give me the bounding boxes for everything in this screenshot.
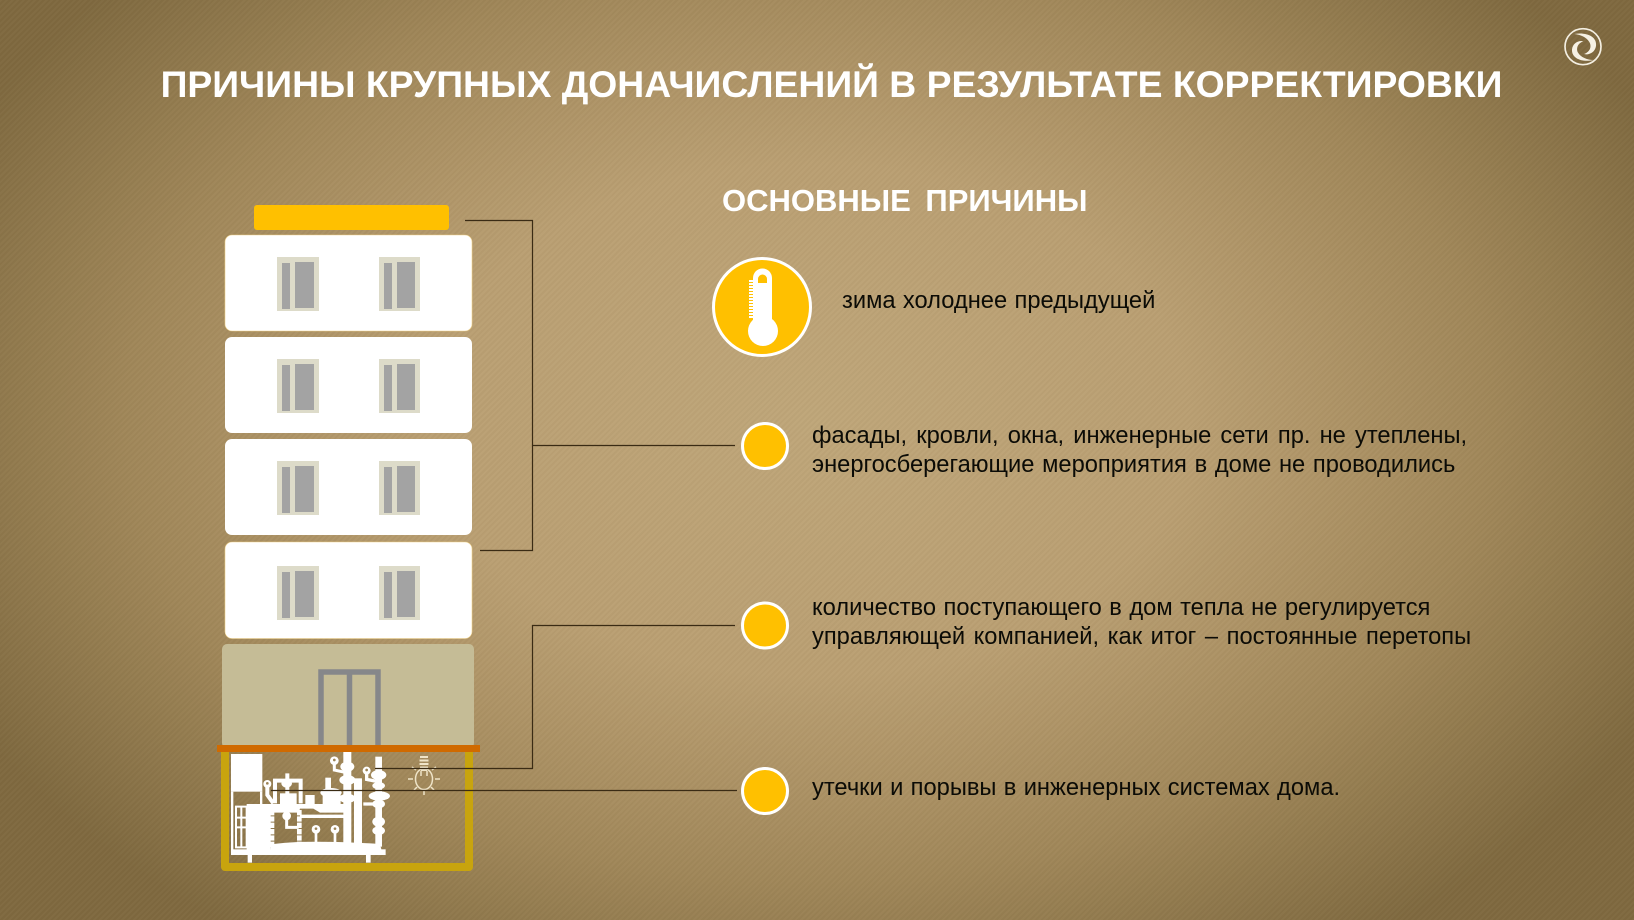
cause 1: thermometer icon	[714, 258, 810, 356]
basement walls	[225, 750, 469, 867]
foundation slab	[217, 745, 480, 752]
cause 2 text: энергосберегающие мероприятия в доме не проводились	[812, 452, 1455, 478]
building	[217, 205, 480, 867]
title: ПРИЧИНЫ КРУПНЫХ ДОНАЧИСЛЕНИЙ В РЕЗУЛЬТАТЕ КОРРЕКТИРОВКИ	[161, 63, 1502, 105]
roof	[254, 205, 449, 230]
cause 3 marker	[742, 603, 788, 648]
ground floor with door	[222, 644, 474, 748]
cause 1 text: зима холоднее предыдущей	[842, 288, 1155, 314]
icon: heating unit	[231, 752, 390, 863]
floor 1	[225, 542, 472, 638]
floor 2	[225, 439, 472, 535]
cause 3 text: количество поступающего в дом тепла не регулируется	[812, 595, 1430, 621]
connector: bracket from floors to cause 2	[465, 220, 735, 550]
floor 4	[225, 235, 472, 331]
connector: engineering systems to cause 4	[271, 790, 737, 792]
icon: light bulb	[408, 757, 440, 795]
cause 4 text: утечки и порывы в инженерных системах дома.	[812, 775, 1340, 801]
floor 3	[225, 337, 472, 433]
cause 2 marker	[742, 424, 788, 468]
section heading: ОСНОВНЫЕ ПРИЧИНЫ	[722, 183, 1087, 218]
icon: company logo	[1565, 29, 1601, 65]
cause 4 marker	[742, 768, 788, 814]
cause 2 text: фасады, кровли, окна, инженерные сети пр. не утеплены,	[812, 423, 1467, 449]
cause 2 text	[812, 423, 1467, 478]
cause 3 text: управляющей компанией, как итог – постоянные перетопы	[812, 624, 1471, 650]
connector: heat supply to cause 3	[375, 626, 735, 768]
cause 3 text	[812, 595, 1471, 650]
